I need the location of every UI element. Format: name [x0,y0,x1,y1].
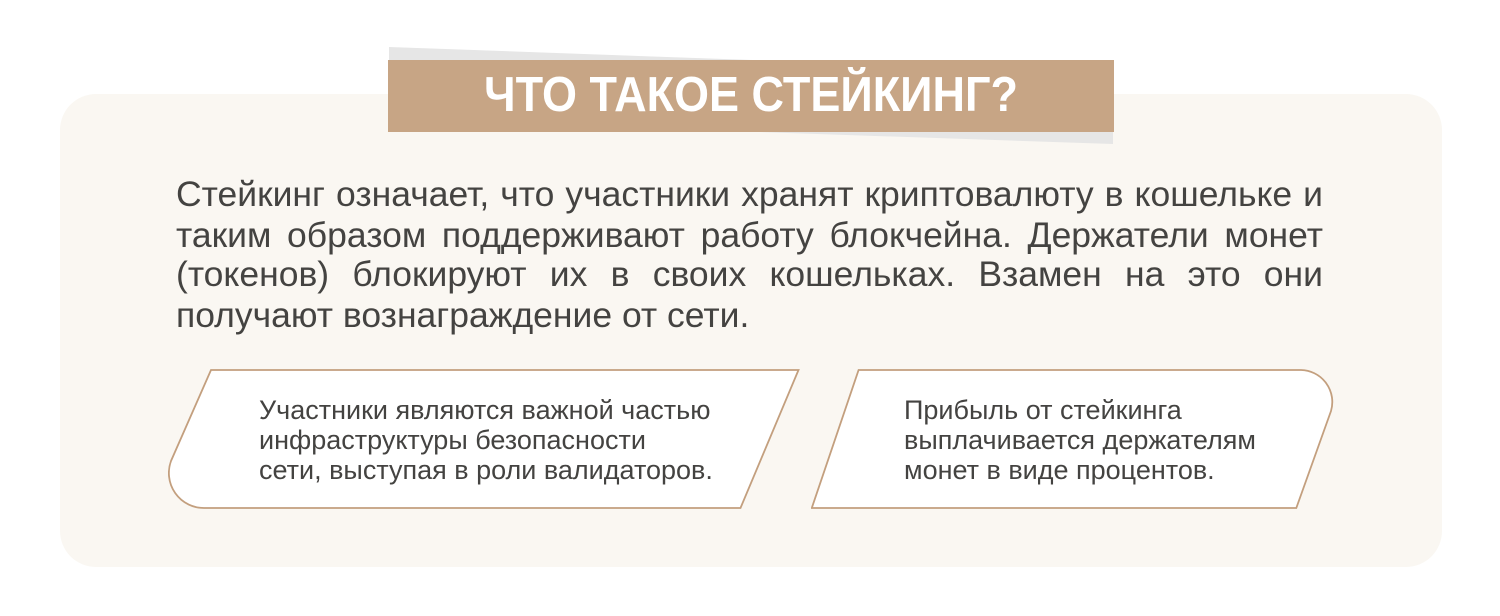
title: ЧТО ТАКОЕ СТЕЙКИНГ? [484,68,1018,122]
title banner [388,47,1114,144]
callout text: Прибыль от стейкинга [904,395,1182,425]
main paragraph: (токенов) блокируют их в своих кошельках. Взамен на это они [176,254,1323,294]
callout text [904,395,1256,485]
callout text: инфраструктуры безопасности [259,425,646,455]
callout: profit [811,369,1334,509]
background panel [60,94,1442,567]
callout text: сети, выступая в роли валидаторов. [259,455,713,485]
main paragraph [176,174,1323,335]
callout text: монет в виде процентов. [904,455,1215,485]
callout text: Участники являются важной частью [259,395,710,425]
main paragraph: таким образом поддерживают работу блокчейна. Держатели монет [176,215,1323,255]
main paragraph: получают вознаграждение от сети. [176,295,749,335]
main paragraph: Стейкинг означает, что участники хранят криптовалюту в кошельке и [176,174,1323,214]
callout text: выплачивается держателям [904,425,1256,455]
callout: participants [168,369,800,509]
callout text [259,395,713,485]
